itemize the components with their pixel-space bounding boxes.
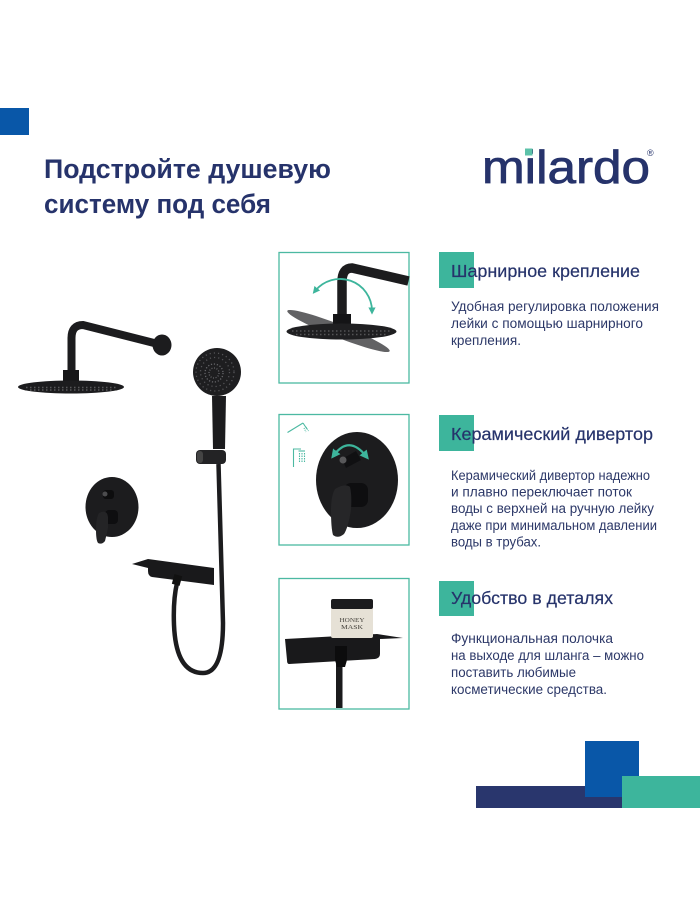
logo: milardo: ® — [647, 148, 654, 158]
panel: articulated joint — [279, 252, 409, 383]
arrow: switch — [334, 445, 366, 456]
jar with label — [331, 599, 373, 638]
lever handle — [331, 483, 368, 537]
text: details description — [451, 631, 644, 697]
overhead shower head — [18, 380, 124, 394]
tilted shower head — [285, 305, 392, 357]
shower head — [286, 324, 396, 340]
hose pipe — [336, 660, 342, 708]
text: details description: Функциональная полочка — [451, 631, 613, 646]
text: details description: косметические средства. — [451, 682, 607, 697]
title: Подстройте душевую — [44, 154, 331, 184]
text: joint description: лейки с помощью шарнирного — [451, 316, 643, 331]
text: joint description — [451, 299, 659, 348]
heading: joint — [439, 252, 640, 288]
mixer plate — [316, 432, 398, 528]
overhead shower arm — [63, 325, 172, 382]
text: diverter description: воды с верхней на ручную лейку — [451, 501, 654, 516]
diverter knob — [340, 451, 361, 468]
text: diverter description: и плавно переключает поток — [451, 484, 632, 500]
icon: overhead shower — [288, 423, 308, 432]
logo: milardo: milardo — [482, 141, 650, 193]
panel: ceramic diverter — [279, 414, 409, 545]
jar with label: MASK — [341, 624, 363, 631]
jar with label: HONEY — [340, 617, 365, 624]
decorative corner blocks — [476, 741, 700, 808]
panel: shelf detail — [279, 578, 409, 709]
text: diverter description: Керамический дивертор надежно — [451, 468, 650, 483]
heading: joint: Шарнирное крепление — [451, 261, 640, 281]
hose connector — [335, 646, 347, 667]
shelf — [285, 634, 403, 664]
diverter mixer — [86, 477, 138, 544]
arm and collar — [333, 268, 408, 326]
hose — [174, 464, 223, 673]
title — [44, 154, 331, 219]
text: joint description: крепления. — [451, 333, 521, 348]
title: систему под себя — [44, 189, 271, 219]
text: joint description: Удобная регулировка положения — [451, 299, 659, 314]
text: diverter description: воды в трубах. — [451, 534, 541, 550]
text: diverter description: даже при минимальном давлении — [451, 518, 657, 533]
heading: details — [439, 581, 613, 616]
wall shelf — [132, 559, 214, 585]
product: full shower system — [18, 325, 241, 673]
icon: hand shower — [294, 449, 305, 467]
text: details description: поставить любимые — [451, 665, 576, 680]
corner accent square — [0, 108, 29, 135]
heading: details: Удобство в деталях — [451, 588, 613, 608]
heading: diverter — [439, 415, 653, 451]
text: details description: на выходе для шланга – можно — [451, 648, 644, 663]
text: diverter description — [451, 468, 657, 550]
hand shower — [193, 348, 241, 464]
arrow: rotation — [315, 279, 372, 311]
heading: diverter: Керамический дивертор — [451, 424, 653, 444]
